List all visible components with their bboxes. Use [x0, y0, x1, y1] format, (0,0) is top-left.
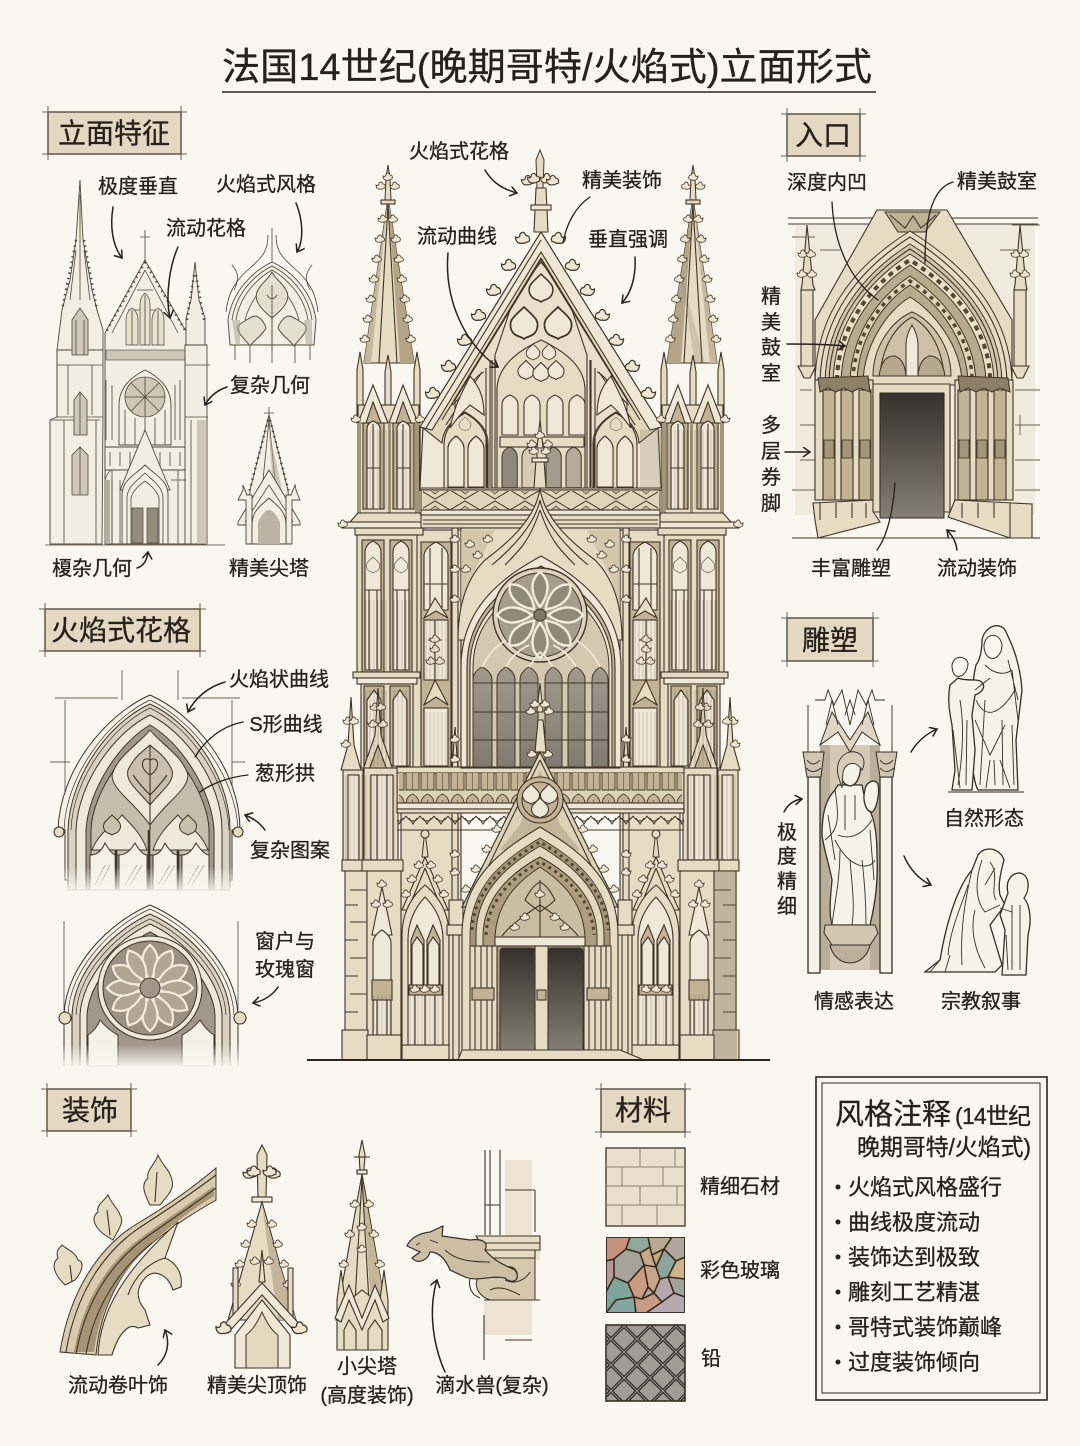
label: 精美装饰: 精美装饰: [582, 169, 662, 192]
label: 多层券脚 vertical: 层: [761, 441, 781, 463]
arrow: [245, 815, 265, 830]
arrow: [296, 203, 302, 252]
label: 宗教叙事: 宗教叙事: [941, 990, 1021, 1013]
leader line: [925, 182, 953, 263]
label: 流动曲线: 流动曲线: [417, 225, 497, 248]
central pinnacle on gable: [522, 150, 559, 232]
side pinnacles: [797, 225, 1029, 378]
label: 流动装饰: 流动装饰: [937, 557, 1017, 580]
label: 精美尖塔: 精美尖塔: [229, 557, 309, 580]
note heading: 晚期哥特/火焰式): [857, 1134, 1031, 1160]
door opening: [873, 384, 950, 518]
label: 精美鼓室 vertical: 美: [761, 311, 781, 334]
steps: [458, 1050, 644, 1060]
note list: 装饰达到极致: [848, 1245, 980, 1270]
label: 精美尖顶饰: 精美尖顶饰: [207, 1374, 307, 1397]
label: 精美鼓室 vertical: 鼓: [761, 336, 781, 359]
note heading: 风格注释: [835, 1098, 951, 1131]
small facade sketch: [45, 180, 225, 545]
lower kneeling figures: [925, 849, 1030, 975]
arrow: [911, 729, 937, 752]
label: 小尖塔(高度装饰): (高度装饰): [320, 1384, 414, 1407]
panel: decoration: [41, 1083, 549, 1407]
label: 复杂几何: 复杂几何: [230, 374, 310, 397]
flamboyant arch window: [50, 670, 245, 894]
label: 小尖塔(高度装饰): 小尖塔: [337, 1356, 397, 1378]
leader arrow: [832, 202, 878, 300]
label: 极度精细 vertical: 精: [777, 870, 797, 893]
tympanum: [495, 867, 585, 937]
gargoyle and wall: [407, 1150, 540, 1360]
label: 葱形拱: 葱形拱: [255, 762, 315, 785]
label: 极度精细 vertical: 度: [777, 845, 797, 868]
label: 窗户与玫瑰窗: 窗户与: [255, 931, 315, 953]
heading: 入口: 入口: [795, 120, 851, 151]
note heading: (14世纪: [955, 1103, 1031, 1129]
label: 精美鼓室: 精美鼓室: [957, 170, 1037, 193]
panel: materials: [595, 1083, 780, 1401]
label: 极度垂直: 极度垂直: [98, 175, 178, 198]
leader line: [877, 483, 895, 550]
label: 极度精细 vertical: 细: [777, 895, 797, 918]
heading: 入口: [781, 108, 866, 162]
arrow: [785, 451, 810, 453]
arrow: [253, 987, 278, 1003]
label: 极度精细 vertical: 极: [777, 822, 797, 844]
portal drawing: [788, 210, 1040, 538]
note list: 哥特式装饰巅峰: [848, 1315, 1002, 1340]
label: S形曲线: S形曲线: [249, 713, 323, 736]
heading: 雕塑: [781, 612, 879, 667]
heading: 火焰式花格: 火焰式花格: [51, 615, 191, 646]
label: 多层券脚 vertical: 券: [761, 466, 781, 489]
arrow: [188, 682, 225, 712]
arrow: [158, 1330, 168, 1365]
arrow: [112, 207, 122, 258]
panel: sculpture: [777, 612, 1030, 1013]
note heading: [835, 1098, 1031, 1160]
label: 自然形态: 自然形态: [944, 807, 1024, 830]
arrow: [137, 552, 148, 568]
Virgin figure: [822, 752, 879, 963]
note list: 火焰式风格盛行: [848, 1175, 1002, 1200]
lancet windows: [473, 640, 608, 767]
panel: central facade elevation: [307, 150, 770, 1060]
heading: 火焰式花格: [39, 603, 206, 657]
label: 火焰状曲线: 火焰状曲线: [229, 668, 329, 691]
label: 滴水兽(复杂): 滴水兽(复杂): [435, 1374, 549, 1397]
panel: facade features: [42, 106, 318, 580]
label: 精美鼓室 vertical: 室: [761, 362, 781, 385]
jamb columns left: [813, 376, 880, 538]
jamb columns right: [948, 376, 1032, 538]
niche with Virgin statue: [803, 690, 897, 973]
arrow: [787, 344, 845, 346]
flowing crocket moulding: [54, 1155, 216, 1355]
panel: entrance: [761, 108, 1040, 580]
rose window: [493, 568, 587, 662]
label: 铅: 铅: [701, 1347, 721, 1370]
label: 窗户与玫瑰窗: 玫瑰窗: [255, 958, 315, 981]
arrow: [485, 170, 517, 193]
arrow: [904, 856, 931, 885]
heading: 装饰: [41, 1083, 137, 1137]
heading: 立面特征: [42, 106, 187, 160]
flamboyant style sketch: [226, 228, 318, 363]
note list: 曲线极度流动: [848, 1210, 980, 1235]
arrow: [784, 799, 802, 812]
label: 精美鼓室 vertical: 精: [761, 286, 781, 308]
heading: 立面特征: 立面特征: [58, 118, 170, 149]
leader line: [200, 775, 248, 792]
upper wall and ogee arch over rose window: [458, 420, 622, 768]
note list: [836, 1175, 1002, 1375]
title: 法国14世纪(晚期哥特/火焰式)立面形式: [222, 47, 872, 89]
central portal with gable: [458, 683, 644, 1060]
left half of towers and wall: [338, 165, 541, 1060]
label: 火焰式风格: 火焰式风格: [216, 173, 316, 196]
archivolts: [815, 231, 1012, 385]
watercolour shading on right tower: [640, 270, 737, 1060]
arrow: [205, 387, 227, 405]
arrow: [622, 257, 635, 303]
arrow: [168, 247, 178, 318]
label: 垂直强调: 垂直强调: [588, 228, 668, 251]
ornate finial: [216, 1145, 307, 1368]
label: 流动卷叶饰: 流动卷叶饰: [68, 1374, 168, 1397]
heading: 雕塑: 雕塑: [802, 625, 858, 656]
swatch: stained glass: [606, 1237, 685, 1313]
label: 复杂图案: 复杂图案: [250, 839, 330, 862]
heading: 材料: [595, 1083, 691, 1138]
label: 榎杂几何: 榎杂几何: [52, 557, 132, 580]
ground line: [307, 1059, 770, 1061]
label: 流动花格: 流动花格: [166, 217, 246, 240]
label: 多层券脚 vertical: 多: [761, 415, 781, 437]
note list: 雕刻工艺精湛: [848, 1280, 980, 1305]
label: 情感表达: 情感表达: [814, 990, 894, 1013]
leader line: [195, 722, 243, 757]
label: 火焰式花格 facade: 火焰式花格: [409, 140, 509, 163]
label: 丰富雕塑: 丰富雕塑: [811, 557, 891, 580]
main gable: [420, 232, 662, 490]
small pinnacle: [335, 1140, 389, 1350]
label: 多层券脚 vertical: 脚: [761, 492, 781, 515]
double doors: [500, 946, 583, 1051]
swatch: lead: [606, 1325, 685, 1401]
panel: flamboyant tracery: [39, 603, 330, 1068]
note list: 过度装饰倾向: [848, 1350, 980, 1375]
label: 深度内凹: 深度内凹: [787, 171, 867, 194]
label: 彩色玻璃: 彩色玻璃: [700, 1259, 780, 1282]
rose window arch: [55, 905, 246, 1068]
right half of towers and wall: [540, 165, 743, 1060]
heading: 材料: 材料: [615, 1095, 671, 1126]
upper statue pair: [948, 626, 1024, 792]
great arch with rose window: [461, 556, 621, 767]
small spire sketch: [238, 407, 300, 544]
leader line: [563, 197, 590, 243]
heading: 装饰: 装饰: [62, 1095, 118, 1126]
arrow: [448, 253, 498, 367]
arrow: [947, 530, 957, 550]
label: 精细石材: 精细石材: [700, 1175, 780, 1198]
jamb columns: [470, 946, 611, 1050]
panel: style notes: [816, 1077, 1047, 1400]
arrow: [432, 1280, 445, 1372]
swatch: fine stone: [606, 1148, 685, 1226]
